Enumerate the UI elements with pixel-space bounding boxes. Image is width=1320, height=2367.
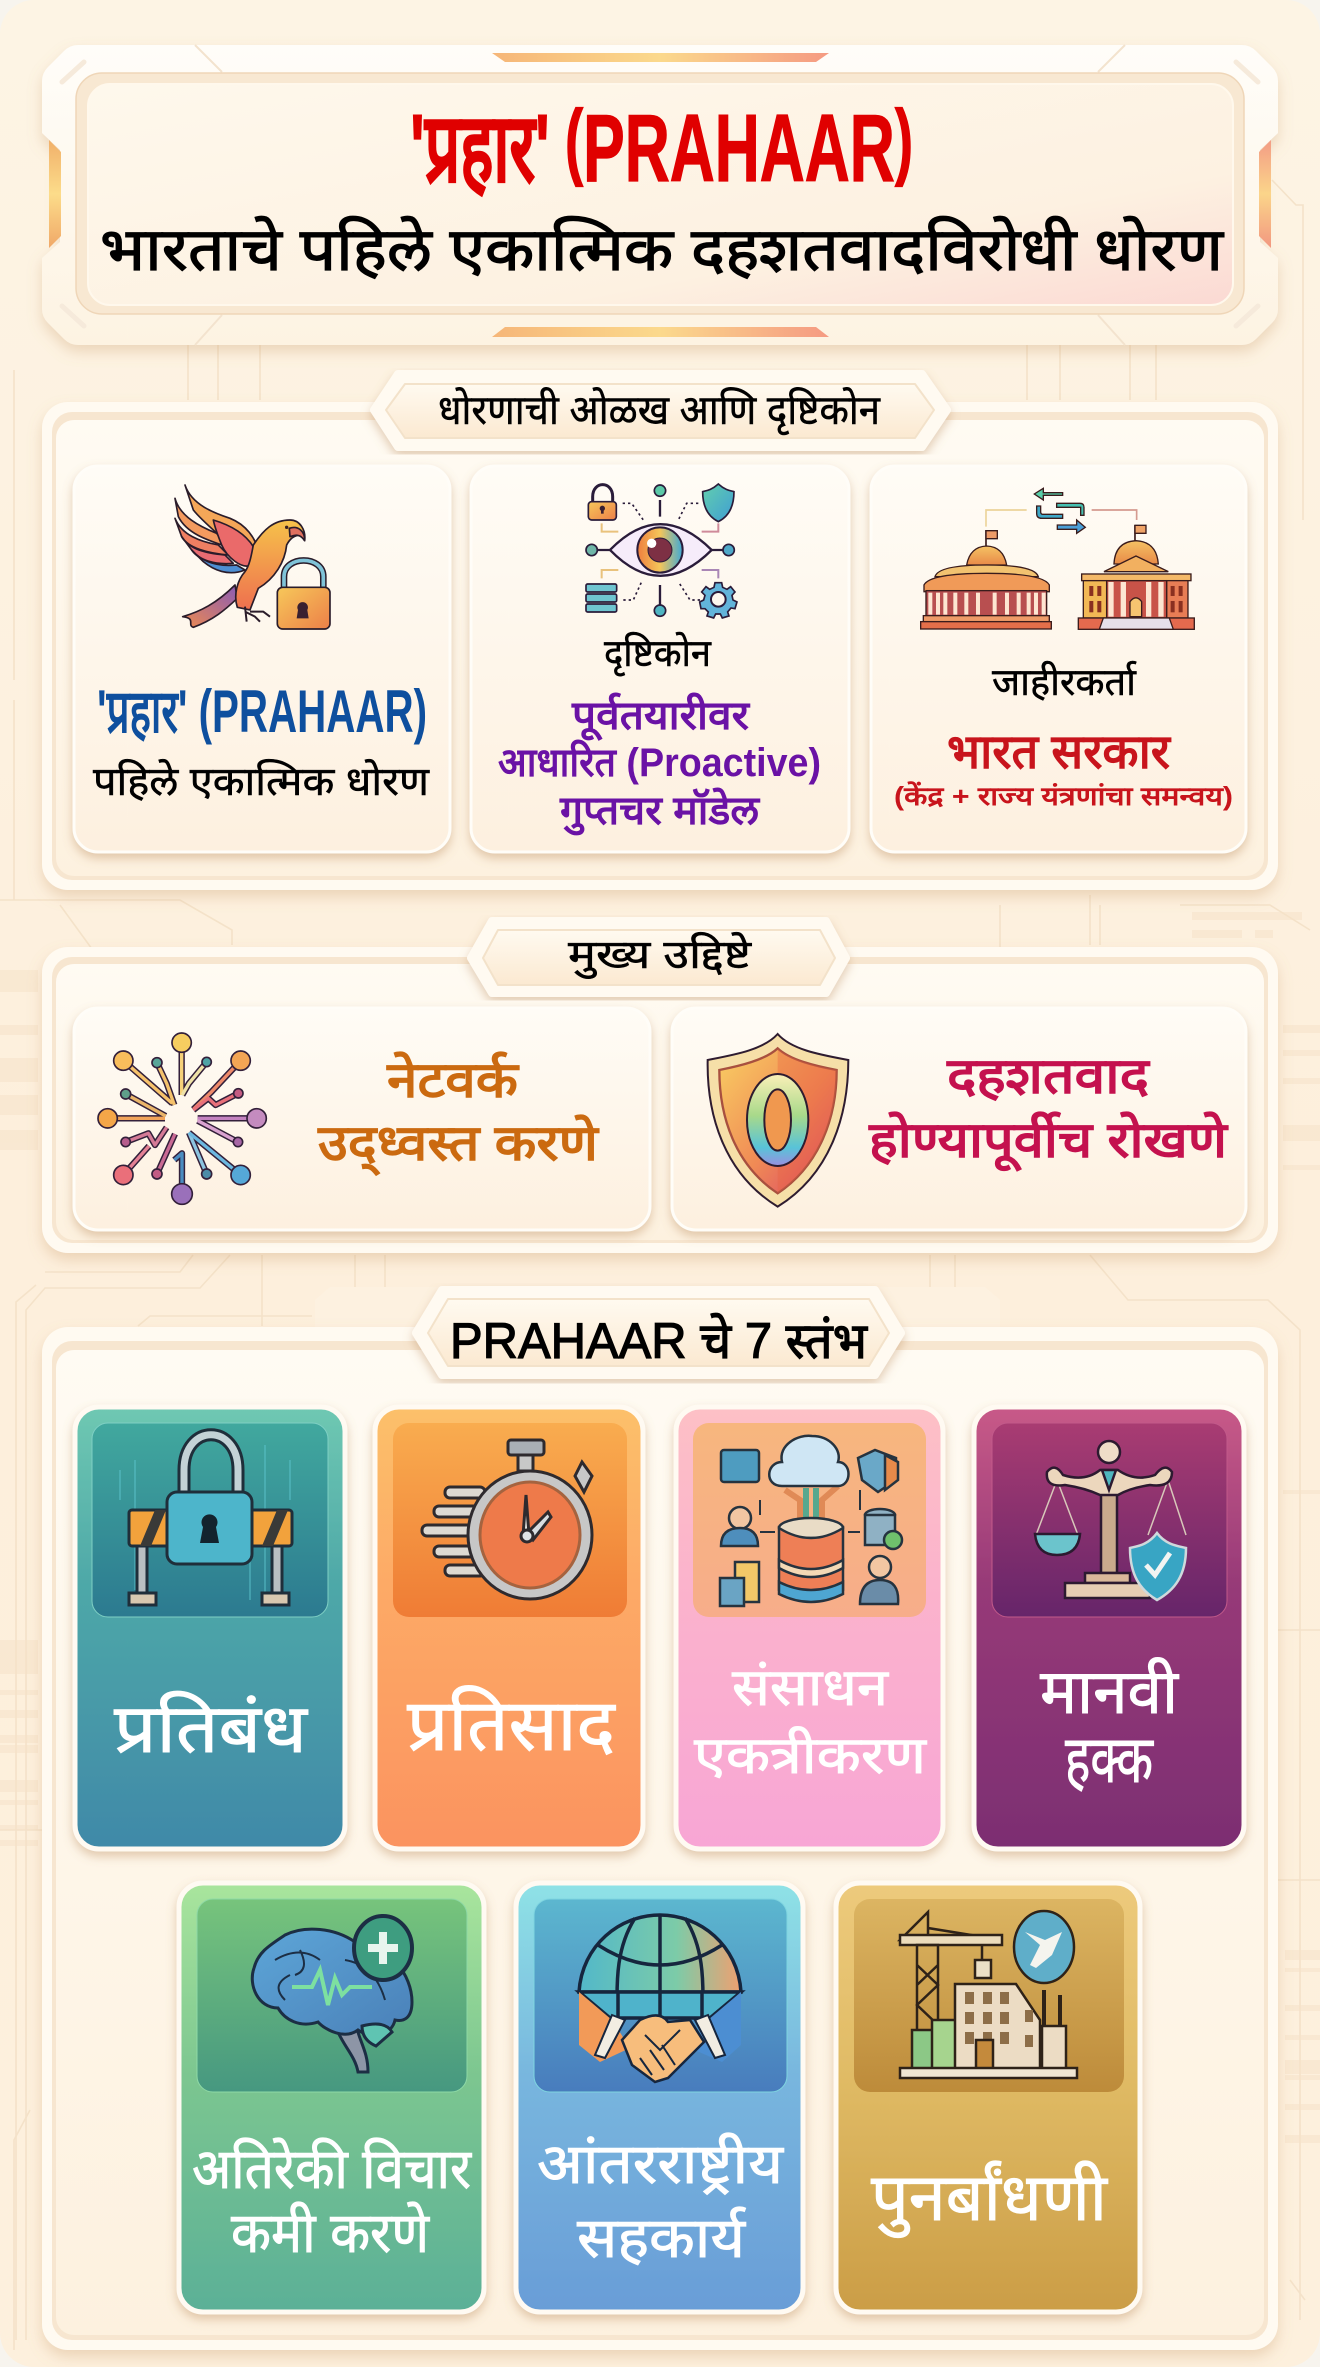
pillar: response (375, 1407, 643, 1849)
icon: stopwatch (422, 1440, 592, 1599)
title line 2: भारताचे पहिले एकात्मिक दहशतवादविरोधी धोरण (100, 216, 1225, 283)
title line 1: PRAHAAR (583, 95, 895, 202)
objective text: नेटवर्क (386, 1051, 520, 1108)
card: prahaar (74, 466, 450, 852)
card subtitle: पहिले एकात्मिक धोरण (93, 759, 430, 804)
pillar name: संसाधन (732, 1659, 889, 1717)
icon: brain with plus (252, 1916, 412, 2072)
decorative glow strips (49, 53, 1271, 337)
objective text (868, 1048, 1229, 1172)
panel: main objectives (42, 921, 1278, 1253)
pillar name (537, 2132, 785, 2269)
pillar: human rights (974, 1407, 1244, 1849)
pillar: de-radicalisation (179, 1883, 484, 2312)
card: prevent terrorism (672, 1008, 1246, 1230)
icon: data hub (720, 1436, 902, 1606)
title line 1: ) (895, 93, 913, 187)
pillar name: सहकार्य (577, 2206, 747, 2269)
objective text: उद्ध्वस्त करणे (317, 1114, 600, 1176)
pillar name: प्रतिबंध (114, 1691, 308, 1767)
pillar name: अतिरेकी विचार (192, 2137, 472, 2200)
section heading (471, 921, 846, 993)
objective text: दहशतवाद (946, 1048, 1151, 1104)
section heading (374, 374, 947, 447)
icon: zero shield (708, 1034, 848, 1207)
pillar name: आंतरराष्ट्रीय (537, 2132, 785, 2195)
card body text: गुप्तचर मॉडेल (559, 787, 761, 836)
icon: lock barrier (120, 1435, 292, 1605)
icon: broken network (98, 1033, 266, 1204)
icon: crane building dove (900, 1911, 1077, 2078)
pillar: international cooperation (516, 1883, 803, 2312)
icon: eagle with padlock (175, 485, 330, 629)
card heading: 'प्रहार' (PRAHAAR) (97, 678, 427, 745)
objective text: होण्यापूर्वीच रोखणे (868, 1111, 1229, 1172)
pillar name: हक्क (1065, 1722, 1154, 1796)
pillar name (192, 2137, 472, 2264)
card: dismantle networks (74, 1008, 650, 1230)
card heading: भारत सरकार (947, 726, 1172, 779)
section heading: धोरणाची ओळख आणि दृष्टिकोन (438, 387, 881, 435)
pillar: deterrence (75, 1407, 345, 1849)
card: vision (471, 466, 849, 852)
title line 1: ( (550, 93, 583, 187)
pillar name: पुनर्बांधणी (871, 2160, 1109, 2238)
title line 1: 'प्रहार' (410, 95, 625, 202)
card body text: पूर्वतयारीवर (571, 692, 751, 741)
card label: दृष्टिकोन (604, 631, 712, 677)
panel: seven pillars (42, 1287, 1278, 2350)
pillar name: एकत्रीकरण (694, 1726, 928, 1785)
section heading: मुख्य उद्दिष्टे (568, 932, 752, 979)
section heading: PRAHAAR चे 7 स्तंभ (450, 1313, 868, 1369)
icon: scales and shield (1035, 1441, 1186, 1600)
objective text (317, 1051, 600, 1176)
icon: parliament buildings (921, 488, 1194, 629)
pillar name: प्रतिसाद (407, 1685, 616, 1766)
icon: globe and handshake (579, 1915, 741, 2082)
card note: (केंद्र + राज्य यंत्रणांचा समन्वय) (894, 781, 1233, 811)
card: announcer (871, 466, 1246, 852)
pillar name: कमी करणे (231, 2201, 430, 2264)
pillar name (1040, 1657, 1179, 1796)
pillar name (694, 1659, 928, 1785)
icon: eye network (586, 484, 737, 618)
section heading (416, 1290, 901, 1375)
card label: जाहीरकर्ता (992, 660, 1137, 704)
pillar name: मानवी (1040, 1657, 1179, 1727)
panel: policy identity and vision (42, 374, 1278, 890)
pillar: resource integration (676, 1407, 943, 1849)
card body text (498, 692, 821, 836)
title banner (42, 45, 1278, 345)
card body text: आधारित (Proactive) (498, 739, 821, 785)
pillar: reconstruction (836, 1883, 1140, 2312)
